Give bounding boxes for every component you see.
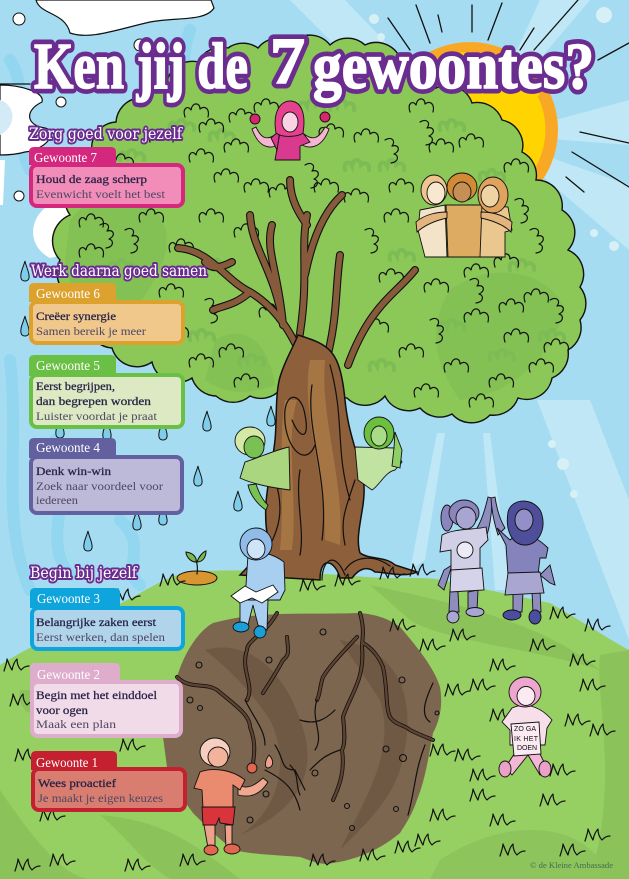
- panel: gewoonte 3: Eerst werken, dan spelen: [36, 632, 165, 644]
- heading: Begin bij jezelf: Begin bij jezelf: [30, 563, 138, 582]
- panel: gewoonte 6: Creëer synergie: [36, 311, 116, 323]
- title: 7: [270, 25, 305, 98]
- panel: gewoonte 7: Evenwicht voelt het best: [36, 189, 166, 201]
- character: blue child reading: [231, 528, 285, 638]
- title: gewoontes?: [313, 30, 594, 103]
- tree branches: [178, 180, 415, 365]
- rain drops: [21, 261, 275, 551]
- panel: gewoonte 4: Zoek naar voordeel voor: [36, 481, 163, 493]
- character: green boy behind the tree: [235, 427, 290, 510]
- sun beams: [0, 0, 629, 192]
- panel: gewoonte 6: Samen bereik je meer: [36, 326, 146, 338]
- sun rays in the sky: [290, 0, 629, 640]
- title: 7: [270, 25, 305, 98]
- grass tufts: [4, 564, 615, 871]
- sign: IK HET: [514, 736, 539, 743]
- character: purple girl with sun shirt: [438, 497, 492, 623]
- panel: gewoonte 4: iedereen: [36, 495, 78, 507]
- character: pink person with apples: [250, 101, 330, 160]
- sign: ZO GA: [514, 726, 536, 733]
- panel: gewoonte 4: Denk win-win: [36, 466, 111, 478]
- panel: gewoonte 7: [29, 147, 183, 206]
- sky swirls on the left: [10, 30, 190, 590]
- title: Ken jij de: [34, 30, 248, 103]
- panel: gewoonte 5: [29, 355, 183, 427]
- panel: gewoonte 3: Gewoonte 3: [37, 592, 100, 607]
- character: red boy with apple: [194, 738, 273, 855]
- bubbles: [13, 7, 619, 498]
- heading: Zorg goed voor jezelf: Zorg goed voor jezelf: [29, 124, 183, 143]
- character: pink child with sign: [499, 677, 552, 777]
- character: three friends: [416, 173, 512, 257]
- sign: DOEN: [517, 745, 537, 752]
- hill: [0, 570, 629, 879]
- tree canopy: [53, 35, 586, 423]
- character: purple girl with curly hair: [491, 497, 555, 624]
- character: green girl behind the tree: [355, 417, 402, 490]
- panel: gewoonte 3: [30, 588, 183, 649]
- panel: gewoonte 2: [30, 663, 181, 736]
- panel: gewoonte 1: [31, 751, 185, 810]
- panel: gewoonte 7: Houd de zaag scherp: [36, 174, 147, 186]
- panel: gewoonte 4: Gewoonte 4: [36, 441, 100, 456]
- panel: gewoonte 5: Luister voordat je praat: [36, 411, 158, 423]
- title: gewoontes?: [313, 30, 594, 103]
- panel: gewoonte 5: dan begrepen worden: [36, 396, 151, 408]
- sun: [382, 42, 558, 218]
- top cloud: [36, 0, 214, 35]
- tree trunk: [240, 335, 417, 580]
- copyright: © de Kleine Ambassade: [530, 861, 613, 870]
- panel: gewoonte 4: [29, 438, 182, 513]
- panel: gewoonte 1: Je maakt je eigen keuzes: [38, 793, 164, 805]
- panel: gewoonte 7: Gewoonte 7: [34, 151, 97, 166]
- title: Ken jij de: [34, 30, 248, 103]
- panel: gewoonte 2: Gewoonte 2: [37, 668, 100, 683]
- panel: gewoonte 6: [29, 283, 183, 343]
- sprout on the hill: [177, 551, 217, 585]
- left cloud: [0, 85, 85, 258]
- panel: gewoonte 1: Gewoonte 1: [36, 756, 98, 771]
- panel: gewoonte 5: Gewoonte 5: [36, 359, 100, 374]
- panel: gewoonte 2: Begin met het einddoel: [36, 690, 157, 702]
- soil hole with roots: [163, 613, 441, 864]
- panel: gewoonte 2: Maak een plan: [36, 719, 116, 731]
- title: [34, 25, 594, 103]
- panel: gewoonte 2: voor ogen: [36, 705, 88, 717]
- panel: gewoonte 6: Gewoonte 6: [36, 287, 100, 302]
- panel: gewoonte 1: Wees proactief: [38, 778, 116, 790]
- panel: gewoonte 5: Eerst begrijpen,: [36, 381, 115, 393]
- heading: Werk daarna goed samen: Werk daarna goed samen: [31, 261, 207, 280]
- panel: gewoonte 3: Belangrijke zaken eerst: [36, 617, 157, 629]
- sign: [511, 722, 541, 756]
